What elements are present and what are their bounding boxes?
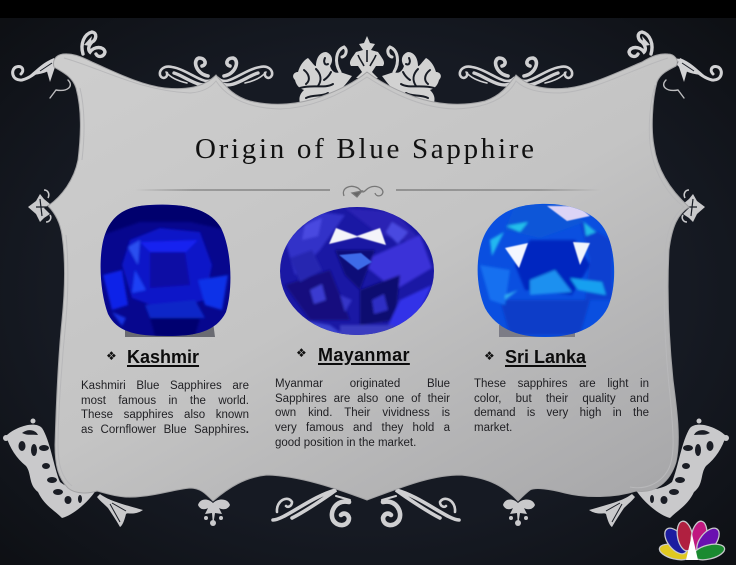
text: Sri Lanka description: demand is very high in the: [474, 407, 649, 419]
side ornament right: [682, 190, 705, 222]
logo: peacock: [658, 520, 726, 563]
heading: Kashmir: Kashmir: [127, 347, 199, 367]
bottom small ornament right: [503, 499, 535, 526]
bottom-right corner ornament: [589, 418, 729, 527]
text: Kashmir description: most famous in the world.: [81, 395, 249, 407]
gem: Sri Lanka sapphire: [478, 204, 614, 337]
text: Kashmir description: These sapphires also known: [81, 409, 249, 421]
heading: Sri Lanka: ❖: [484, 349, 495, 363]
text: Kashmir description: as Cornflower Blue Sapphires.: [81, 424, 249, 436]
text: Mayanmar description: Myanmar originated Blue: [275, 378, 450, 390]
gem: Mayanmar sapphire: [278, 205, 438, 338]
heading: Mayanmar: Mayanmar: [318, 345, 410, 365]
heading: Mayanmar: ❖: [296, 346, 307, 360]
frame ornament: right swag: [460, 58, 514, 85]
side ornament left: [28, 190, 51, 222]
text: Kashmir description: [81, 380, 249, 436]
text: Sri Lanka description: [474, 378, 649, 434]
frame ornament: left swag: [160, 58, 214, 85]
title: Origin of Blue Sapphire: [195, 133, 534, 165]
text: Mayanmar description: [275, 378, 450, 449]
frame ornament: left swag right half: [218, 58, 272, 85]
text: Mayanmar description: very famous and they hold a: [275, 422, 450, 434]
divider right: [396, 189, 601, 191]
divider left: [135, 189, 330, 191]
frame ornament: central crest: [293, 36, 441, 103]
text: Sri Lanka description: These sapphires are light in: [474, 378, 649, 390]
divider ornament: [343, 186, 383, 197]
text: Mayanmar description: Sapphires are also one of their: [275, 393, 450, 405]
ornate frame panel: [48, 54, 689, 501]
text: Mayanmar description: good position in the market.: [275, 437, 416, 449]
text: Sri Lanka description: market.: [474, 422, 512, 434]
gem: Kashmir sapphire: [100, 204, 230, 337]
bottom scroll right: [382, 490, 459, 525]
bottom-left corner ornament: [3, 418, 143, 527]
text: Mayanmar description: own kind. Their vividness is: [275, 407, 450, 419]
frame ornament: right swag right half: [518, 58, 572, 85]
heading: Kashmir: ❖: [106, 349, 117, 363]
bottom scroll left: [273, 490, 350, 525]
text: Kashmir description: Kashmiri Blue Sapphires are: [81, 380, 249, 392]
top-right corner flourish: [629, 32, 721, 98]
frame inner line: [58, 58, 684, 488]
top-left corner flourish: [13, 32, 105, 98]
bottom small ornament left: [198, 499, 230, 526]
text: Sri Lanka description: color, but their quality and: [474, 393, 649, 405]
heading: Sri Lanka: Sri Lanka: [505, 347, 586, 367]
